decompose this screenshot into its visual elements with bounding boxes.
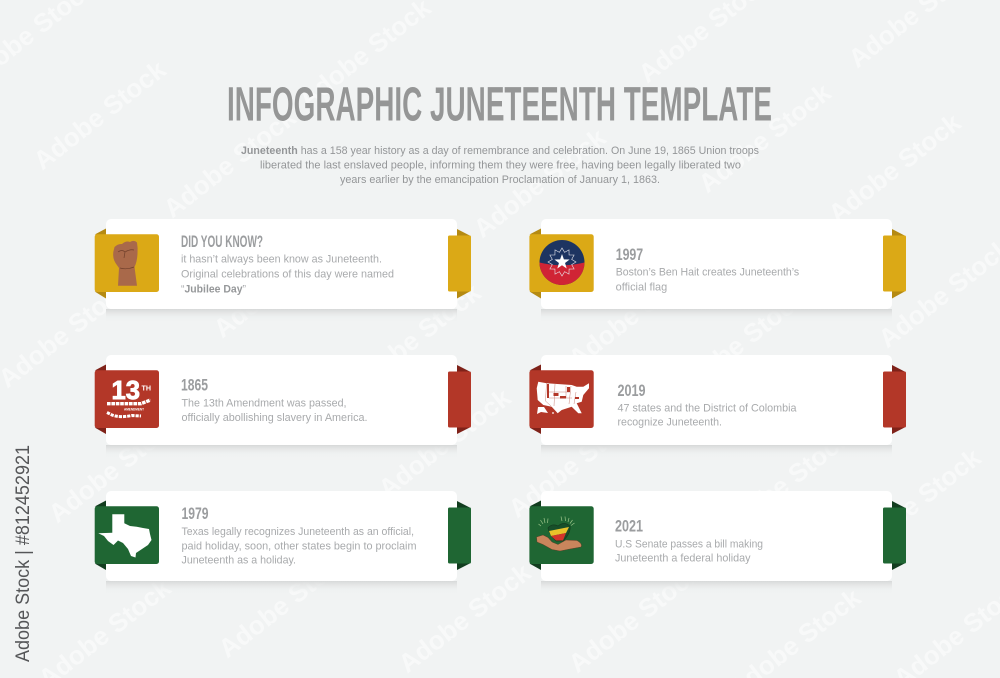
intro text: years earlier by the emancipation Proclamation of January 1, 1863. — [340, 174, 660, 186]
intro text — [241, 145, 760, 186]
panel: did you know — [95, 219, 471, 321]
body text: The 13th Amendment was passed, — [182, 398, 346, 410]
panel: 1997 — [529, 219, 906, 321]
body text: Original celebrations of this day were named — [181, 268, 394, 280]
watermark pattern: Adobe Stock — [693, 77, 837, 199]
watermark pattern: Adobe Stock — [843, 442, 987, 564]
watermark pattern: Adobe Stock — [563, 557, 707, 678]
icon: hands holding heart — [536, 516, 582, 551]
watermark pattern: Adobe Stock — [208, 222, 352, 344]
panel: 2021 — [529, 491, 906, 593]
body text: Texas legally recognizes Juneteenth as an official, — [182, 526, 414, 538]
body text — [616, 267, 800, 294]
watermark pattern: Adobe Stock — [563, 252, 707, 374]
body text: Juneteenth as a holiday. — [182, 554, 296, 566]
panel: 2019 — [529, 355, 906, 457]
body text — [182, 526, 417, 566]
heading: 1979 — [182, 504, 208, 523]
icon: juneteenth flag — [540, 240, 584, 285]
icon: raised fist — [113, 241, 138, 286]
watermark pattern: Adobe Stock — [668, 282, 812, 404]
stock id label: Adobe Stock | #812452921 — [13, 445, 34, 662]
watermark pattern: Adobe Stock — [373, 382, 517, 504]
watermark pattern: Adobe Stock — [713, 422, 857, 544]
body text: Boston’s Ben Hait creates Juneteenth’s — [616, 267, 800, 279]
body text — [618, 403, 796, 429]
watermark pattern: Adobe Stock — [393, 557, 537, 678]
panel: 1979 — [95, 491, 471, 593]
icon: 13th amendment: TH — [142, 384, 151, 392]
intro text: Juneteenth has a 158 year history as a day of remembrance and celebration. On June 19, 1865 Union troops — [241, 145, 760, 157]
body text: official flag — [616, 282, 667, 294]
watermark pattern: Adobe Stock — [823, 107, 967, 229]
watermark pattern: Adobe Stock — [468, 122, 612, 244]
body text — [181, 254, 394, 295]
heading: 1997 — [616, 245, 643, 264]
body text — [182, 398, 368, 424]
watermark pattern: Adobe Stock — [503, 402, 647, 524]
body text: Juneteenth a federal holiday — [615, 553, 751, 565]
icon: usa map — [537, 382, 589, 414]
icon: texas — [98, 514, 152, 558]
body text — [615, 539, 763, 565]
icon: 13th amendment: 13 — [112, 375, 140, 405]
body text: “Jubilee Day” — [181, 283, 246, 295]
panel: 1865 — [95, 355, 471, 457]
watermark pattern: Adobe Stock — [43, 407, 187, 529]
heading: DID YOU KNOW? — [181, 232, 263, 251]
body text: it hasn’t always been know as Juneteenth. — [181, 254, 382, 266]
body text: U.S Senate passes a bill making — [615, 539, 763, 551]
watermark pattern: Adobe Stock — [158, 102, 302, 224]
watermark pattern: Adobe Stock — [343, 277, 487, 399]
watermark pattern: Adobe Stock — [28, 54, 172, 176]
body text: recognize Juneteenth. — [618, 417, 722, 429]
body text: paid holiday, soon, other states begin to proclaim — [182, 540, 417, 552]
heading: 2021 — [615, 517, 643, 536]
icon: 13th amendment: AMENDMENT — [124, 408, 145, 412]
heading: 2019 — [618, 381, 646, 400]
intro text: liberated the last enslaved people, informing them they were free, having been legally liberated two — [260, 160, 741, 172]
icon: 13th amendment — [107, 375, 151, 417]
heading: 1865 — [181, 376, 208, 394]
body text: officially abollishing slavery in America. — [182, 412, 368, 424]
body text: 47 states and the District of Colombia — [618, 403, 796, 415]
watermark pattern: Adobe Stock — [213, 542, 357, 664]
